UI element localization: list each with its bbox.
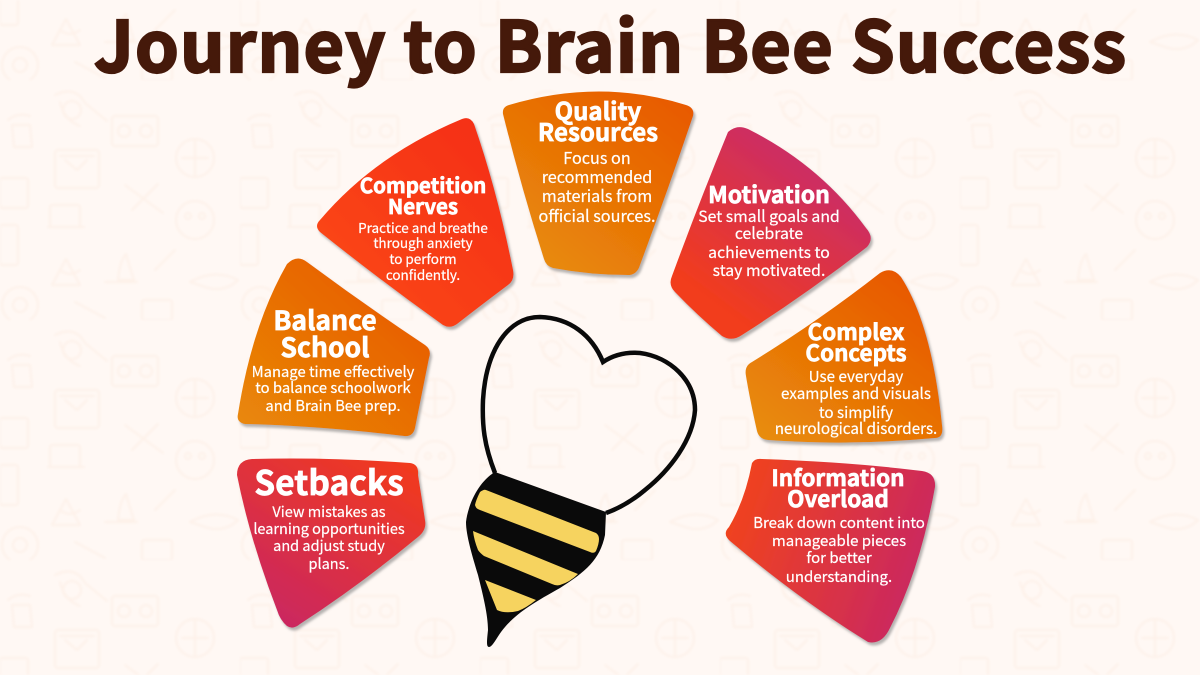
body text: confidently. — [386, 264, 460, 284]
heading: Motivation — [708, 176, 830, 210]
heading: Resources — [538, 113, 658, 148]
heading: Competition — [360, 169, 486, 199]
panel: quality resources — [503, 92, 693, 275]
panel shape: competition nerves — [317, 118, 513, 327]
body text: to balance schoolwork — [255, 377, 412, 398]
body text: celebrate — [735, 221, 803, 244]
panel: information overload — [726, 459, 935, 642]
panel shape: setbacks — [237, 458, 425, 628]
body text: plans. — [309, 553, 349, 574]
heading: School — [280, 326, 370, 365]
heading: Overload — [787, 482, 889, 514]
bee wing heart outline — [483, 317, 695, 513]
heading: Quality — [555, 92, 642, 127]
heading: Complex — [808, 315, 905, 347]
body text: recommended — [542, 164, 652, 188]
panel: balance school — [238, 258, 430, 436]
body text: and adjust study — [273, 535, 385, 556]
panel shape: complex concepts — [746, 270, 942, 443]
panel shape: information overload — [726, 459, 935, 642]
body text: understanding. — [786, 566, 892, 587]
bee stripe 2 — [473, 531, 578, 585]
body text: neurological disorders. — [775, 417, 937, 439]
body text: Break down content into — [753, 512, 925, 533]
body text: Use everyday — [809, 365, 903, 387]
body text: Practice and breathe — [358, 217, 488, 237]
bee stripe 1 — [475, 490, 599, 553]
heading: Information — [771, 461, 905, 493]
heading: Setbacks — [254, 456, 404, 505]
body text: examples and visuals — [781, 382, 931, 404]
panel: setbacks — [237, 456, 425, 628]
panel: competition nerves — [317, 118, 513, 327]
bee stripe 3 — [485, 580, 536, 612]
body text: Set small goals and — [698, 204, 840, 227]
body text: for better — [806, 547, 872, 568]
icon: bee with heart-shaped wings — [466, 317, 695, 647]
panel: complex concepts — [746, 270, 942, 443]
panel shape: quality resources — [503, 92, 693, 275]
body text: materials from — [542, 183, 652, 207]
body text: stay motivated. — [713, 258, 825, 281]
panel shape: balance school — [238, 258, 430, 436]
heading: Balance — [273, 299, 377, 338]
body text: Focus on — [563, 145, 631, 169]
body text: View mistakes as — [272, 501, 386, 522]
body text: to simplify — [819, 401, 893, 423]
body text: manageable pieces — [772, 530, 906, 551]
body text: and Brain Bee prep. — [265, 395, 401, 416]
body text: achievements to — [708, 240, 830, 263]
body text: Manage time effectively — [252, 361, 415, 382]
body text: official sources. — [539, 203, 655, 227]
bee body — [466, 472, 606, 647]
panel shape: motivation — [671, 127, 871, 339]
body text: through anxiety — [373, 232, 473, 252]
heading: Concepts — [805, 336, 907, 368]
heading: Nerves — [388, 190, 458, 220]
panel: motivation — [671, 127, 871, 339]
body text: learning opportunities — [253, 518, 405, 539]
body text: to perform — [389, 248, 457, 268]
